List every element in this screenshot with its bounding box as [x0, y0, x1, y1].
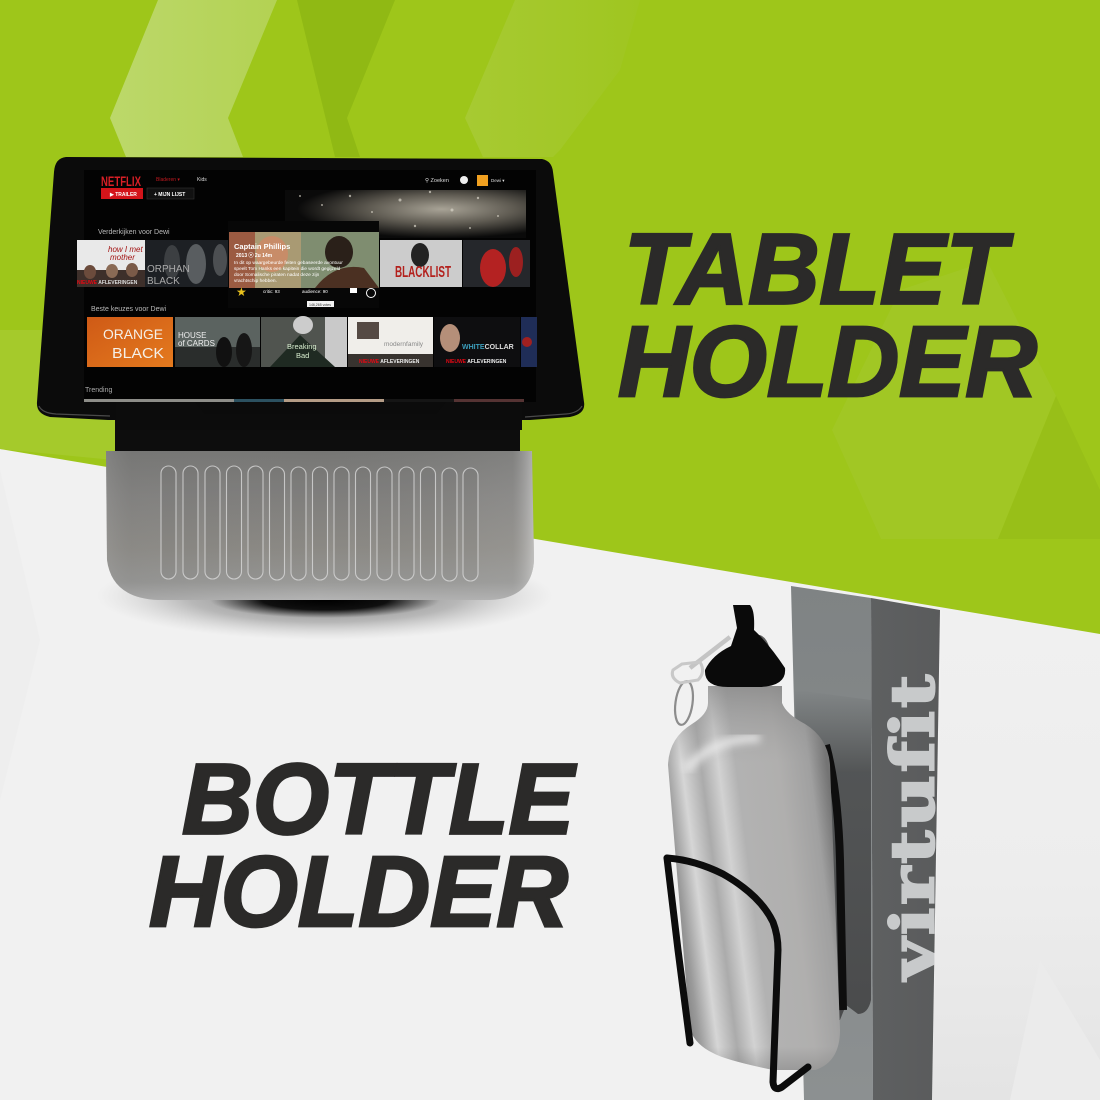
heading: bottle holder: BOTTLE	[182, 744, 577, 856]
popup card: captain phillips: critic: 93	[263, 289, 280, 294]
product: bottle holder	[667, 586, 948, 1100]
row 1 thumbnails: mother	[110, 253, 135, 262]
netflix header: ▶ TRAILER	[109, 192, 137, 198]
bottle highlights	[686, 738, 760, 770]
bracket: front wire	[667, 858, 808, 1089]
heading: tablet holder	[618, 214, 1037, 418]
heading: tablet holder: HOLDER	[618, 306, 1037, 418]
netflix header: NETFLIX	[101, 173, 141, 189]
heading: tablet holder: TABLET	[624, 214, 1014, 326]
popup card: captain phillips: In dit op waargebeurde feiten gebaseerde avontuur	[234, 260, 343, 266]
trending strip	[84, 399, 524, 402]
popup card: captain phillips: Captain Phillips	[234, 242, 290, 251]
post: side face	[871, 598, 940, 1100]
bottle body	[668, 686, 840, 1070]
netflix header: Bladeren ▾	[156, 177, 180, 183]
row 1 thumbnails: BLACKLIST	[395, 264, 451, 281]
netflix header	[101, 173, 505, 199]
netflix header: + MIJN LIJST	[154, 192, 185, 198]
row 2 thumbnails: ORANGE	[103, 326, 163, 342]
row 2 thumbnails: of CARDS	[178, 339, 215, 348]
row heading: verderkijken: Verderkijken voor Dewi	[98, 229, 170, 236]
netflix header: Dewi ▾	[491, 178, 505, 183]
row 2 thumbnails: Breaking	[287, 342, 317, 351]
row 2 thumbnails: NIEUWE AFLEVERINGEN	[446, 359, 507, 365]
row 2 thumbnails: HOUSE	[178, 331, 206, 340]
faint green facets	[0, 330, 165, 465]
row 2 thumbnails: NIEUWE AFLEVERINGEN	[359, 359, 420, 365]
popup card: captain phillips: ★	[236, 285, 247, 299]
row 2 thumbnails: modernfamily	[384, 341, 424, 348]
post: mounting plate shadow	[795, 690, 871, 1020]
row 1 thumbnails: NIEUWE AFLEVERINGEN	[77, 280, 138, 286]
row 2 thumbnails: WHITECOLLAR	[462, 344, 514, 351]
bottle cap	[705, 605, 785, 687]
popup card: captain phillips: vrachtschip hebben.	[234, 278, 277, 284]
row 1 thumbnails: how I met	[108, 245, 143, 254]
tablet screen: netflix	[77, 170, 537, 402]
shadow below plate	[97, 552, 553, 640]
background: green diagonal section	[0, 0, 1100, 634]
row 1 thumbnails	[77, 240, 530, 287]
case edge highlights	[39, 406, 582, 417]
popup card: captain phillips: 146,265 votes	[309, 303, 331, 307]
metal plate with ribs	[106, 451, 534, 600]
row 2 thumbnails: BLACK	[112, 345, 164, 362]
logo: virtufit: virtufit	[877, 672, 948, 982]
netflix header: Kids	[197, 177, 207, 183]
row 1 thumbnails: ORPHAN	[147, 264, 190, 275]
keyring and carabiner	[672, 636, 768, 726]
hero image	[285, 190, 526, 238]
netflix header: ⚲ Zoeken	[425, 177, 449, 184]
row 2 thumbnails	[87, 316, 537, 367]
post: front face	[791, 586, 873, 1100]
popup card: captain phillips	[228, 221, 379, 308]
stand: black mount	[115, 398, 520, 454]
heading: bottle holder: HOLDER	[149, 836, 568, 948]
heading: bottle holder	[149, 744, 577, 948]
popup card: captain phillips: door Somalische piraten nadat deze zijn	[234, 272, 320, 278]
bracket: back wire	[826, 745, 843, 1010]
popup card: captain phillips: speelt Tom Hanks een kapitein die wordt gegijzeld	[234, 266, 341, 272]
row heading: beste keuzes: Beste keuzes voor Dewi	[91, 306, 167, 313]
row 1 thumbnails: BLACK	[147, 276, 180, 287]
popup card: captain phillips: 2013 ⓔ 2u 14m	[236, 252, 273, 259]
tablet bracket lip	[116, 402, 522, 430]
product: tablet holder	[37, 157, 584, 640]
row heading: trending: Trending	[85, 387, 112, 394]
popup card: captain phillips: audience: 90	[302, 289, 328, 294]
tablet case	[37, 157, 584, 420]
row 2 thumbnails: Bad	[296, 351, 309, 360]
